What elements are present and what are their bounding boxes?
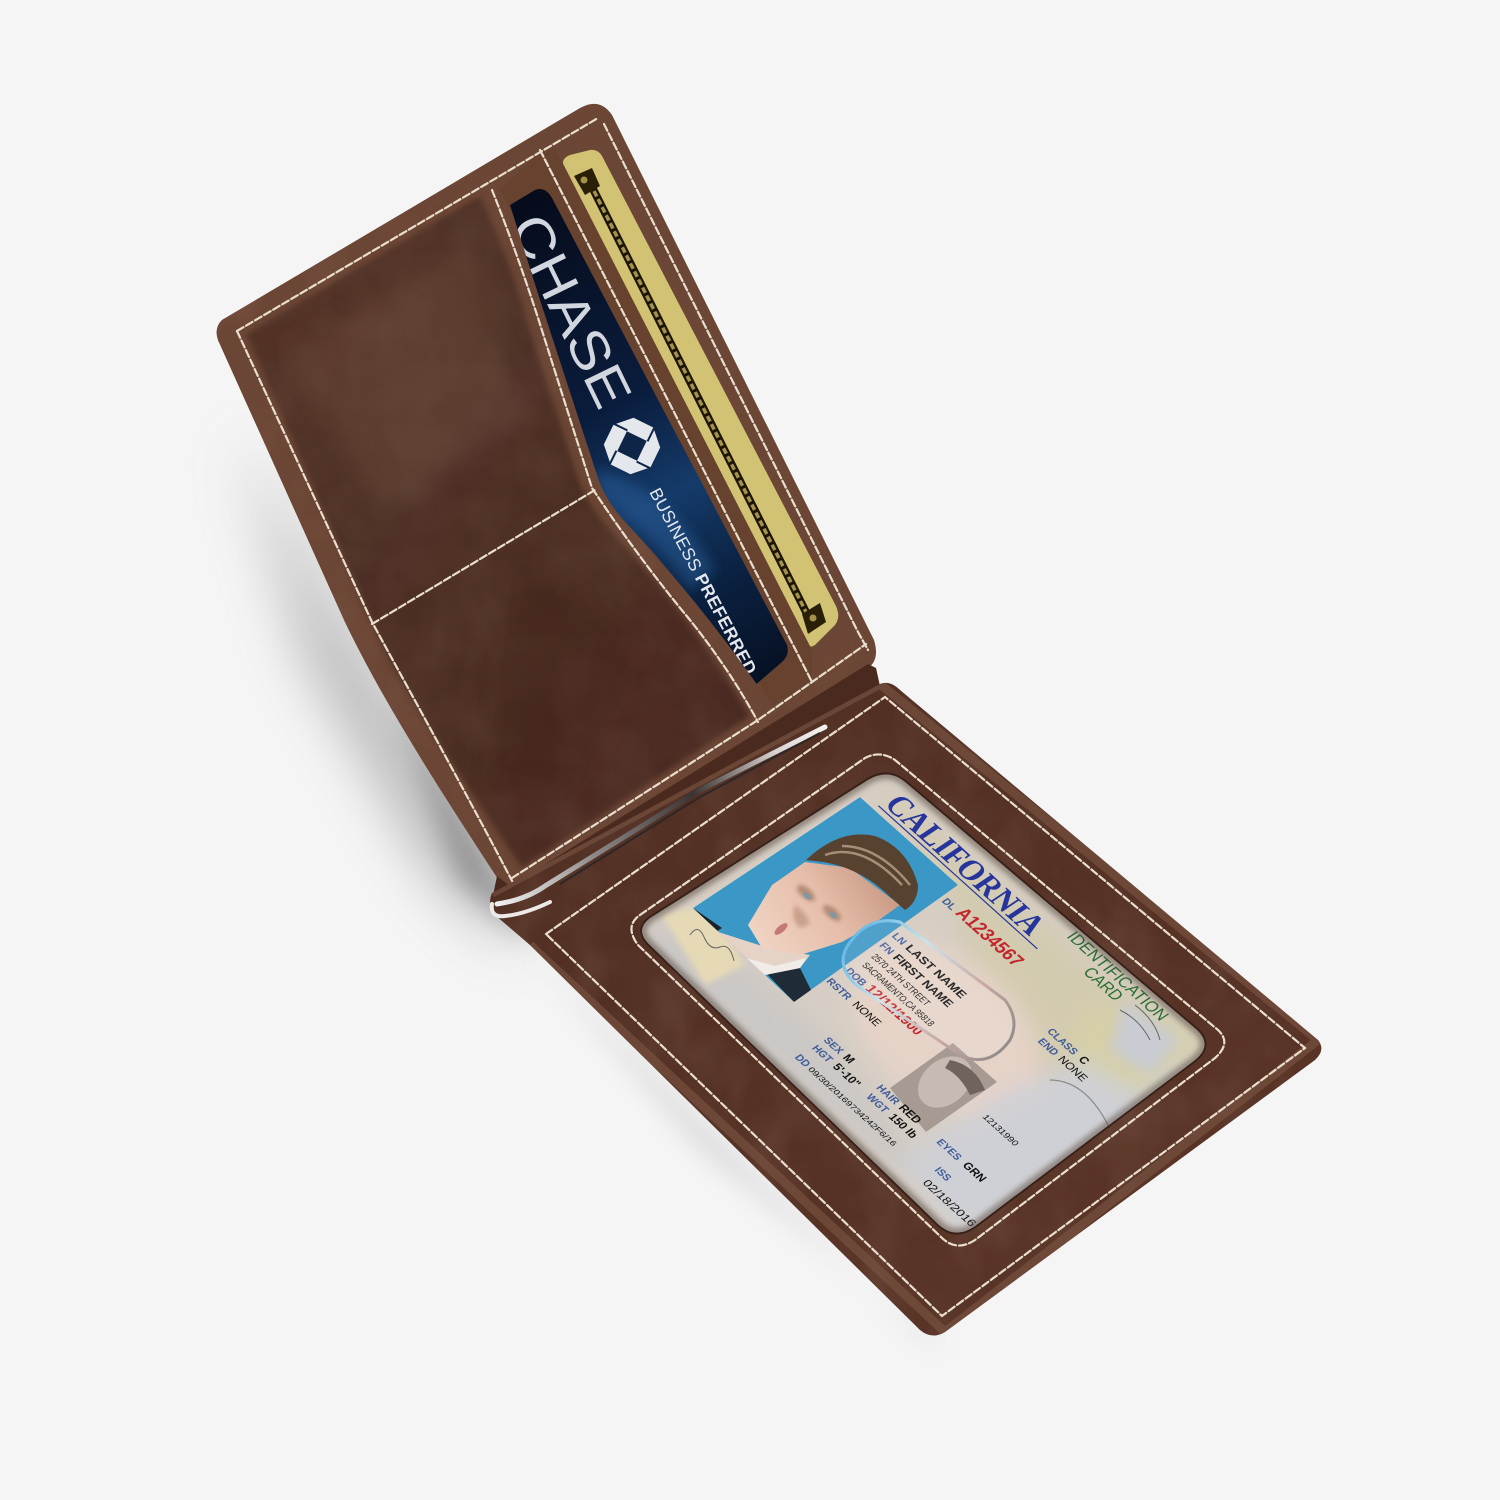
shadow under upper panel bbox=[240, 430, 945, 1345]
gold card bbox=[563, 150, 838, 647]
id card text: CLASS bbox=[1044, 1027, 1080, 1057]
id card text: NONE bbox=[1055, 1054, 1090, 1084]
id card text: ISS bbox=[931, 1166, 953, 1183]
id card text: 150 lb bbox=[885, 1112, 920, 1141]
id card text: RSTR bbox=[823, 977, 854, 1002]
id card text bbox=[661, 781, 1222, 1229]
id card text: WGT bbox=[863, 1093, 891, 1115]
lower panel stitching bbox=[546, 697, 1305, 1316]
eyes, nose and mouth bbox=[773, 882, 844, 937]
id card text: IDENTIFICATION bbox=[1063, 928, 1173, 1024]
middle pocket bbox=[500, 148, 812, 706]
id card text: C bbox=[1075, 1055, 1091, 1067]
id card text: 02/18/2016 bbox=[919, 1178, 978, 1229]
wallet product illustration bbox=[216, 104, 1322, 1336]
small grey photo bbox=[890, 1043, 997, 1132]
id card artwork bbox=[642, 774, 1204, 1232]
id card text: DL bbox=[939, 897, 959, 913]
id card text: GRN bbox=[959, 1160, 988, 1184]
id card text: 2570 24TH STREET bbox=[868, 952, 933, 1008]
id card text: 12131990 bbox=[980, 1113, 1022, 1148]
translucent clip oval bbox=[843, 921, 1014, 1060]
id card text: SEX bbox=[820, 1036, 845, 1056]
lower wallet panel bbox=[480, 670, 1340, 1350]
id card text: HGT bbox=[809, 1044, 835, 1065]
chase logo bbox=[597, 411, 667, 481]
face bbox=[748, 862, 900, 955]
id card text: LAST NAME bbox=[902, 943, 969, 1001]
jacket and collar bbox=[693, 908, 722, 931]
id photo bbox=[693, 797, 958, 1002]
chase card: BUSINESS PREFERRED bbox=[645, 484, 761, 678]
id card text: 09/30/20169734242F6/16 bbox=[806, 1066, 899, 1148]
window inner shadow bbox=[642, 774, 1205, 1233]
front pocket bbox=[217, 166, 776, 888]
id card text: 12/12/1900 bbox=[862, 982, 928, 1038]
chase card: CHASE bbox=[498, 205, 643, 417]
id card text: LN bbox=[889, 932, 908, 947]
id card text: DD bbox=[792, 1053, 812, 1070]
money clip metal bar and ring bbox=[492, 727, 825, 916]
id card text: NONE bbox=[849, 1000, 884, 1029]
id card text: FN bbox=[876, 941, 896, 957]
id card text: 5'-10" bbox=[830, 1062, 863, 1089]
id card text: END bbox=[1035, 1037, 1061, 1058]
id card text: EYES bbox=[933, 1138, 963, 1162]
id card text: SACRAMENTO,CA 95818 bbox=[859, 961, 936, 1029]
id card text: HAIR bbox=[873, 1083, 902, 1107]
id card text: RED bbox=[896, 1103, 924, 1126]
id card text: DOB bbox=[842, 967, 869, 989]
upper wallet panel bbox=[210, 100, 890, 900]
id card text: A1234567 bbox=[950, 904, 1028, 970]
upper panel stitching bbox=[237, 118, 868, 898]
hinge strip bbox=[492, 664, 880, 900]
chase card bbox=[498, 189, 788, 687]
id card text: FIRST NAME bbox=[890, 953, 956, 1010]
hair bbox=[806, 834, 918, 910]
id card text: CALIFORNIA bbox=[877, 789, 1053, 941]
id card text: CARD bbox=[1079, 964, 1127, 1004]
id card text: M bbox=[840, 1053, 857, 1066]
id window bbox=[640, 772, 1206, 1235]
